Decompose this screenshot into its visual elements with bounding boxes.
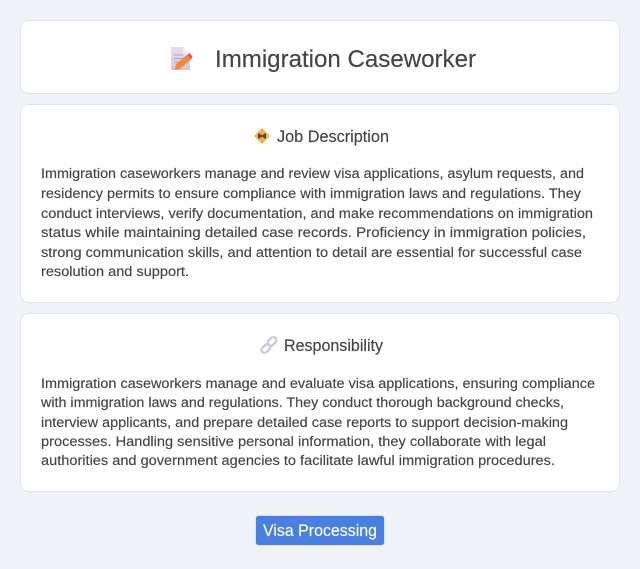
panel: job description bbox=[20, 104, 620, 302]
heading: responsibility: Responsibility bbox=[284, 337, 384, 355]
icon: chain link bbox=[260, 336, 278, 354]
tag: visa processing: Visa Processing bbox=[263, 522, 377, 540]
text block: job description bbox=[41, 166, 593, 280]
panel: responsibility bbox=[20, 314, 620, 492]
heading: job description: Job Description bbox=[277, 128, 389, 146]
text block: job description: strong communication skills, and attention to detail are essential for successful case bbox=[41, 245, 582, 261]
text block: responsibility: interview applicants, and prepare detailed case reports to support decision-making bbox=[41, 415, 568, 431]
text block: responsibility: processes. Handling sensitive personal information, they collaborate with legal bbox=[41, 434, 546, 450]
text block: responsibility: authorities and government agencies to facilitate lawful immigration procedures. bbox=[41, 453, 555, 469]
text block: job description: Immigration caseworkers manage and review visa applications, asylum requests, and bbox=[41, 166, 584, 182]
text block: job description: residency permits to ensure compliance with immigration laws and regulations. They bbox=[41, 186, 582, 202]
text block: responsibility: Immigration caseworkers manage and evaluate visa applications, ensuring compliance bbox=[41, 376, 595, 392]
text block: job description: status while maintaining detailed case records. Proficiency in immigration policies, bbox=[41, 225, 586, 241]
text block: job description: conduct interviews, verify documentation, and make recommendations on immigration bbox=[41, 206, 593, 222]
title: Immigration Caseworker bbox=[215, 46, 476, 73]
icon: diamond road sign bbox=[254, 128, 270, 144]
text block: job description: resolution and support. bbox=[41, 264, 189, 280]
panel: title card bbox=[20, 20, 620, 94]
tag: visa processing bbox=[256, 516, 384, 546]
icon: document with pencil bbox=[171, 47, 192, 70]
text block: responsibility bbox=[40, 376, 595, 469]
text block: responsibility: with immigration laws and regulations. They conduct thorough background checks, bbox=[40, 395, 564, 411]
